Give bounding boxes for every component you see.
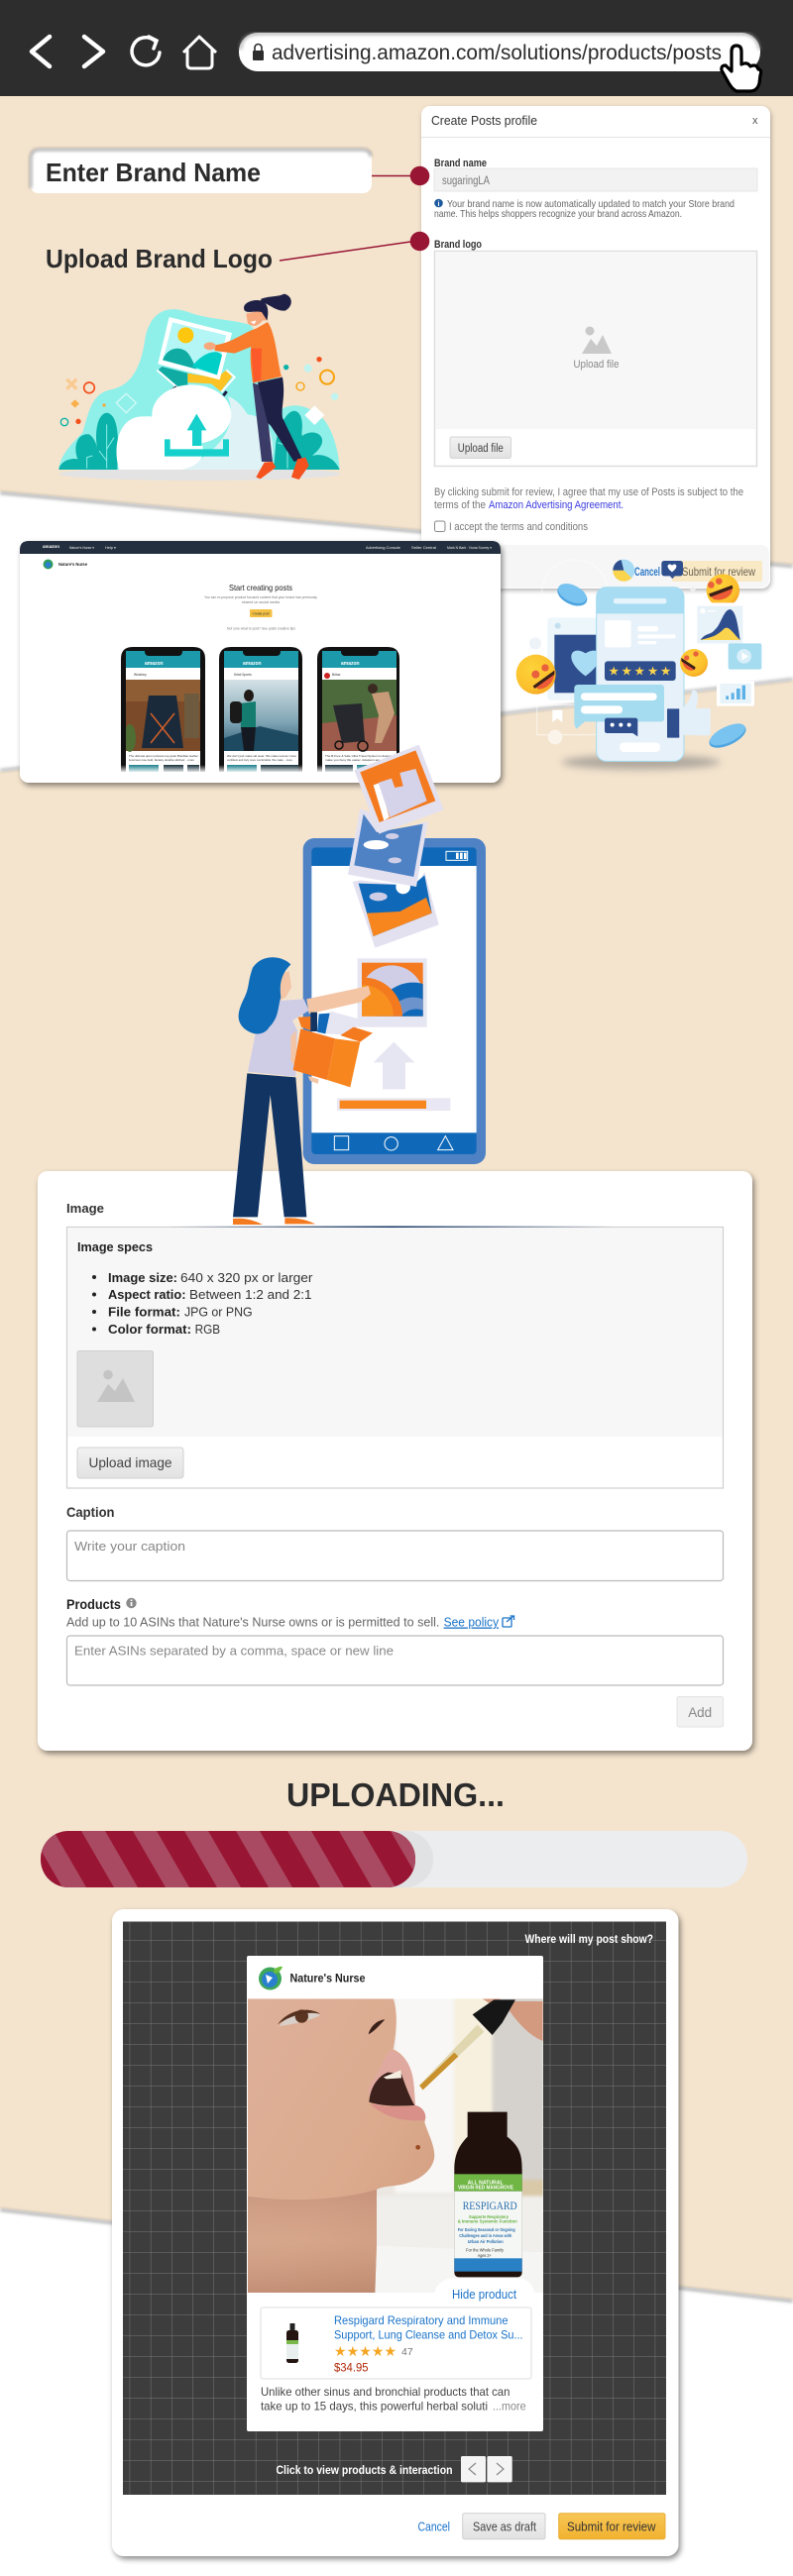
- bottle label text: VIRGIN RED MANGROVE: [458, 2186, 514, 2192]
- phone mockup: stroller post: amazon: [341, 661, 360, 667]
- product box: [261, 2308, 531, 2379]
- dialog title: Create Posts profile: [431, 113, 537, 128]
- rating card: ★: [647, 665, 658, 679]
- specs list: Color format:: [108, 1322, 191, 1337]
- save as draft button: Save as draft: [473, 2519, 536, 2534]
- emoji right: [680, 649, 708, 677]
- panel: post preview card: [112, 1909, 678, 2556]
- upload file button: Upload file: [458, 443, 504, 455]
- phone mockup: stroller post: Britax: [332, 673, 341, 677]
- phone mockup: apron post: The ultimate apron pictures top grain Brazilian leather: [129, 754, 198, 758]
- products field: Add up to 10 ASINs that Nature's Nurse owns or is permitted to sell.: [66, 1615, 439, 1629]
- screenshot nav bar: Seller Central: [411, 546, 436, 550]
- image thumbnail placeholder: [77, 1351, 153, 1427]
- phone mockup: hiker post: amazon: [243, 661, 262, 667]
- icon: bottle thumbnail: [286, 2323, 298, 2363]
- caption text: [261, 2385, 526, 2414]
- info note: i: [438, 201, 440, 208]
- product photo: [243, 1991, 550, 2299]
- brand logo and name: [44, 559, 88, 569]
- dialog submit button: [672, 561, 762, 582]
- terms checkbox: I accept the terms and conditions: [449, 521, 588, 533]
- image specs box: [67, 1227, 724, 1488]
- phone body: [597, 588, 684, 761]
- add button: Add: [688, 1704, 712, 1720]
- intro text: You can re-purpose product focused content that your brand has previously: [204, 595, 317, 599]
- phone mockup: stroller post: make you busy life easier. Adapters are ...more: [325, 758, 391, 762]
- intro text: [204, 595, 317, 604]
- bottle label text: Challenges and in Areas with: [459, 2233, 512, 2238]
- brand logo upload: Upload file: [573, 359, 619, 371]
- decorative line on spec box: [169, 1227, 615, 1228]
- chat bubble: [605, 718, 637, 736]
- brand logo upload: [434, 239, 757, 466]
- bottle label text: ALL NATURAL: [468, 2180, 504, 2186]
- price: $34.95: [334, 2360, 369, 2374]
- create post button: Create post: [252, 612, 270, 616]
- rating card: ★: [660, 665, 671, 679]
- rating card: ★: [609, 665, 620, 679]
- info note: name. This helps shoppers recognize your brand across Amazon.: [434, 208, 682, 220]
- phone mockup: hiker post: [219, 647, 302, 772]
- icon: back arrow: [32, 37, 50, 66]
- screenshot nav bar: Mark N Bark · Nuna Survey ▾: [447, 546, 492, 550]
- specs list: File format:: [108, 1304, 180, 1320]
- rating card: [605, 661, 676, 681]
- cancel link: Cancel: [418, 2519, 450, 2534]
- phone mockup: apron post: Wotchey: [134, 673, 147, 677]
- phone mockup: apron post: luxurious rose bold, fantasy durable stitched ...more: [129, 758, 194, 762]
- product box: Support, Lung Cleanse and Detox Su...: [334, 2328, 523, 2342]
- upload arrow: [374, 1042, 414, 1089]
- fade at phone bottoms: [117, 765, 406, 773]
- submit for review button: [559, 2514, 665, 2539]
- screenshot nav bar: Advertising Console: [366, 546, 400, 550]
- chart card: [694, 602, 746, 647]
- phone mockup: apron post: amazon: [145, 661, 164, 667]
- panel: form upload card: [38, 1171, 752, 1751]
- specs list: Aspect ratio:: [108, 1287, 186, 1302]
- specs list: JPG or PNG: [184, 1304, 253, 1320]
- upload file button: [450, 437, 511, 458]
- speech bubble: [574, 685, 664, 729]
- carousel previous button: [461, 2456, 486, 2482]
- caption field: Caption: [66, 1505, 115, 1520]
- screenshot nav bar: amazon: [43, 544, 59, 549]
- phone frame: [303, 838, 486, 1164]
- icon: forward arrow: [84, 37, 103, 66]
- icon: info: [126, 1598, 137, 1608]
- photo: sunset: [353, 872, 439, 948]
- decorative pills: [554, 580, 749, 753]
- icon: lock: [253, 45, 264, 60]
- tips link: Not sure what to post? See posts creative tips: [227, 626, 295, 630]
- specs list: [92, 1270, 313, 1337]
- screenshot nav bar: Nature's Nurse ▾: [69, 546, 94, 550]
- rating stars: ★★★★★: [334, 2343, 396, 2359]
- photo: sky: [348, 808, 428, 887]
- see policy link: See policy: [444, 1615, 500, 1629]
- video card: [729, 643, 761, 670]
- callout: Enter Brand Name: Enter Brand Name: [46, 158, 261, 187]
- brand name field: sugaringLA: [442, 175, 490, 187]
- icon: reload: [132, 37, 160, 65]
- illustration: woman uploading photo to cloud: [58, 294, 340, 481]
- info note: [434, 198, 735, 220]
- phone mockup: apron post: [121, 647, 205, 772]
- bars card: [717, 682, 754, 706]
- products field: Products: [66, 1597, 121, 1612]
- icon: hand cursor: [722, 46, 761, 91]
- upload image button: [77, 1448, 183, 1478]
- where will my post show: Where will my post show?: [525, 1932, 653, 1946]
- product box: Respigard Respiratory and Immune: [334, 2313, 509, 2327]
- heart panel: [554, 635, 600, 693]
- thumbs up: [667, 690, 711, 738]
- url text: advertising.amazon.com/solutions/products/posts: [272, 42, 722, 64]
- browser toolbar: [0, 0, 793, 96]
- callout: Upload Brand Logo: Upload Brand Logo: [46, 244, 273, 273]
- brand name: Nature's Nurse: [289, 1972, 366, 1986]
- specs list: 640 x 320 px or larger: [180, 1270, 313, 1285]
- bottle label text: [458, 2180, 517, 2258]
- caption text: ...more: [493, 2400, 526, 2414]
- progress bar: [0, 1831, 747, 1887]
- icon: home: [183, 37, 216, 68]
- caption field: Write your caption: [74, 1539, 185, 1554]
- emoji left: [516, 655, 556, 695]
- info note: Your brand name is now automatically updated to match your Store brand: [447, 198, 735, 210]
- phone mockup: hiker post: Kristi Sports: [234, 673, 252, 677]
- specs heading: Image specs: [77, 1239, 153, 1254]
- dialog cancel link: Cancel: [634, 565, 660, 579]
- close button: x: [752, 115, 758, 127]
- specs list: Image size:: [108, 1270, 177, 1285]
- bottle label text: For the Whole Family: [466, 2247, 505, 2253]
- intro text: shared on social media: [242, 600, 280, 604]
- agreement text: [434, 486, 743, 511]
- submit for review button: Submit for review: [567, 2519, 656, 2534]
- photo: city: [354, 745, 444, 834]
- icon: image placeholder: [582, 327, 612, 354]
- post card: [243, 1956, 550, 2431]
- callout: Enter Brand Name: [30, 149, 372, 193]
- image label: Image: [66, 1201, 104, 1216]
- bottle label text: Urban Air Pollution: [468, 2239, 504, 2244]
- dialog submit button: Submit for review: [682, 565, 755, 579]
- illustration: woman placing photos into phone: [233, 745, 486, 1225]
- phone mockup: hiker post: confident and truly more comfortable. We make ...more: [227, 758, 292, 762]
- screenshot nav bar: [20, 541, 501, 554]
- specs list: RGB: [195, 1322, 220, 1337]
- bottle label text: For Daring Seasonal or Ongoing: [458, 2227, 515, 2232]
- heart bubble: [661, 561, 683, 579]
- agreement text: By clicking submit for review, I agree that my use of Posts is subject to the: [434, 486, 743, 498]
- save as draft button: [463, 2514, 545, 2539]
- address bar: [239, 33, 760, 71]
- add button: [677, 1696, 724, 1727]
- bottle label text: Supports Respiratory: [469, 2214, 509, 2219]
- agreement text: terms of the: [434, 499, 486, 511]
- dialog footer tint: [422, 545, 769, 588]
- create post button: [250, 609, 272, 617]
- phone mockup: stroller post: [317, 647, 399, 772]
- rating card: ★: [634, 665, 645, 679]
- bottle label text: RESPIGARD: [463, 2199, 517, 2212]
- progress bar: [337, 1098, 450, 1111]
- panel: Start creating posts screenshot: [20, 541, 501, 783]
- caption text: take up to 15 days, this powerful herbal soluti: [261, 2400, 488, 2414]
- woman figure: [233, 957, 373, 1225]
- rating card: ★: [622, 665, 632, 679]
- carousel next button: [488, 2456, 512, 2482]
- brand name field: Brand name: [434, 158, 487, 169]
- products field: Enter ASINs separated by a comma, space or new line: [74, 1643, 394, 1659]
- illustration: social media phone with emojis: [516, 560, 761, 770]
- brand name field: [434, 158, 757, 191]
- connector: brand logo line and dot: [280, 232, 429, 261]
- heading: uploading: UPLOADING...: [286, 1776, 505, 1813]
- panel: Create Posts profile dialog: [421, 106, 770, 589]
- screenshot nav bar: Help ▾: [105, 546, 116, 550]
- caption field: [66, 1505, 724, 1581]
- brand logo upload: Brand logo: [434, 239, 482, 251]
- products field: [66, 1597, 724, 1685]
- specs list: Between 1:2 and 2:1: [189, 1287, 311, 1302]
- connector: brand name line and dot: [372, 166, 429, 185]
- brand logo and name: Nature's Nurse: [58, 562, 88, 567]
- phone mockup: stroller post: The B-Free & Safe Ultra Travel System is designed: [325, 754, 395, 758]
- carousel hint: Click to view products & interaction: [276, 2463, 452, 2477]
- agreement text: Amazon Advertising Agreement.: [489, 499, 623, 511]
- phone mockup: hiker post: We don't just make ski wear. We make women more: [227, 754, 296, 758]
- ghost panel: [529, 617, 599, 700]
- icon: brand logo globe: [259, 1967, 283, 1989]
- uploaded picture: [357, 958, 426, 1026]
- caption text: Unlike other sinus and bronchial products that can: [261, 2385, 510, 2399]
- dark grid preview area: [123, 1922, 666, 2495]
- hide product link: Hide product: [452, 2288, 516, 2302]
- bottle label text: & Immune Systemic Function: [458, 2219, 517, 2223]
- emoji top: [707, 574, 739, 607]
- pie icon: [613, 560, 634, 582]
- bottle label text: Ages 2+: [478, 2253, 492, 2258]
- product box: 47: [401, 2346, 413, 2358]
- upload image button: Upload image: [89, 1454, 172, 1470]
- start creating heading: Start creating posts: [229, 583, 292, 592]
